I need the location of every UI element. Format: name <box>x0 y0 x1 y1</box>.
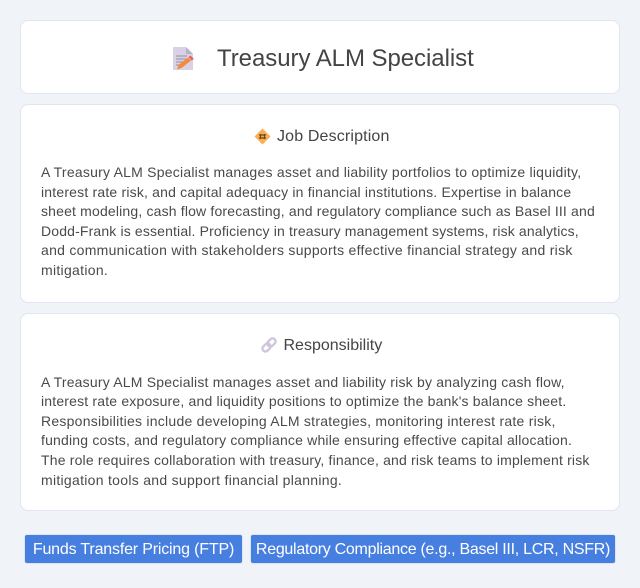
text block: job description: and communication with stakeholders supports effective financial strategy and risk <box>41 242 573 258</box>
text block: job description: mitigation. <box>41 262 108 278</box>
text block: job description: sheet modeling, cash flow forecasting, and regulatory compliance such as Basel III and <box>41 203 595 219</box>
heading: job description: Job Description <box>277 128 390 145</box>
tag: funds transfer pricing <box>24 534 243 564</box>
text block: responsibility: funding costs, and regulatory compliance while ensuring effective capital allocation. <box>41 432 572 448</box>
text block: responsibility <box>41 374 590 488</box>
text block: responsibility: A Treasury ALM Specialist manages asset and liability risk by analyzing cash flow, <box>41 374 565 390</box>
panel: title header <box>20 20 620 94</box>
heading: responsibility: Responsibility <box>284 337 382 354</box>
tag: regulatory compliance: Regulatory Compliance (e.g., Basel III, LCR, NSFR) <box>256 541 610 558</box>
text block: responsibility: interest rate exposure, and liquidity positions to optimize the bank's balance sheet. <box>41 393 566 409</box>
icon: link <box>261 337 277 353</box>
title: Treasury ALM Specialist <box>217 45 474 72</box>
tag: regulatory compliance <box>250 534 616 564</box>
panel: responsibility <box>20 313 620 511</box>
text block: job description: A Treasury ALM Specialist manages asset and liability portfolios to optimize liquidity, <box>41 164 581 180</box>
text block: responsibility: Responsibilities include developing ALM strategies, monitoring interest rate risk, <box>41 413 556 429</box>
text block: job description: interest rate risk, and capital adequacy in financial institutions. Expertise in balance <box>41 184 571 200</box>
panel: job description <box>20 104 620 303</box>
text block: responsibility: mitigation tools and support financial planning. <box>41 472 342 488</box>
tag: funds transfer pricing: Funds Transfer Pricing (FTP) <box>33 541 234 558</box>
text block: responsibility: The role requires collaboration with treasury, finance, and risk teams to implement risk <box>41 452 590 468</box>
text block: job description <box>41 164 595 278</box>
icon: document with pencil <box>173 47 194 70</box>
icon: orange diamond <box>254 128 270 144</box>
text block: job description: Dodd-Frank is essential. Proficiency in treasury management systems, risk analytics, <box>41 223 579 239</box>
